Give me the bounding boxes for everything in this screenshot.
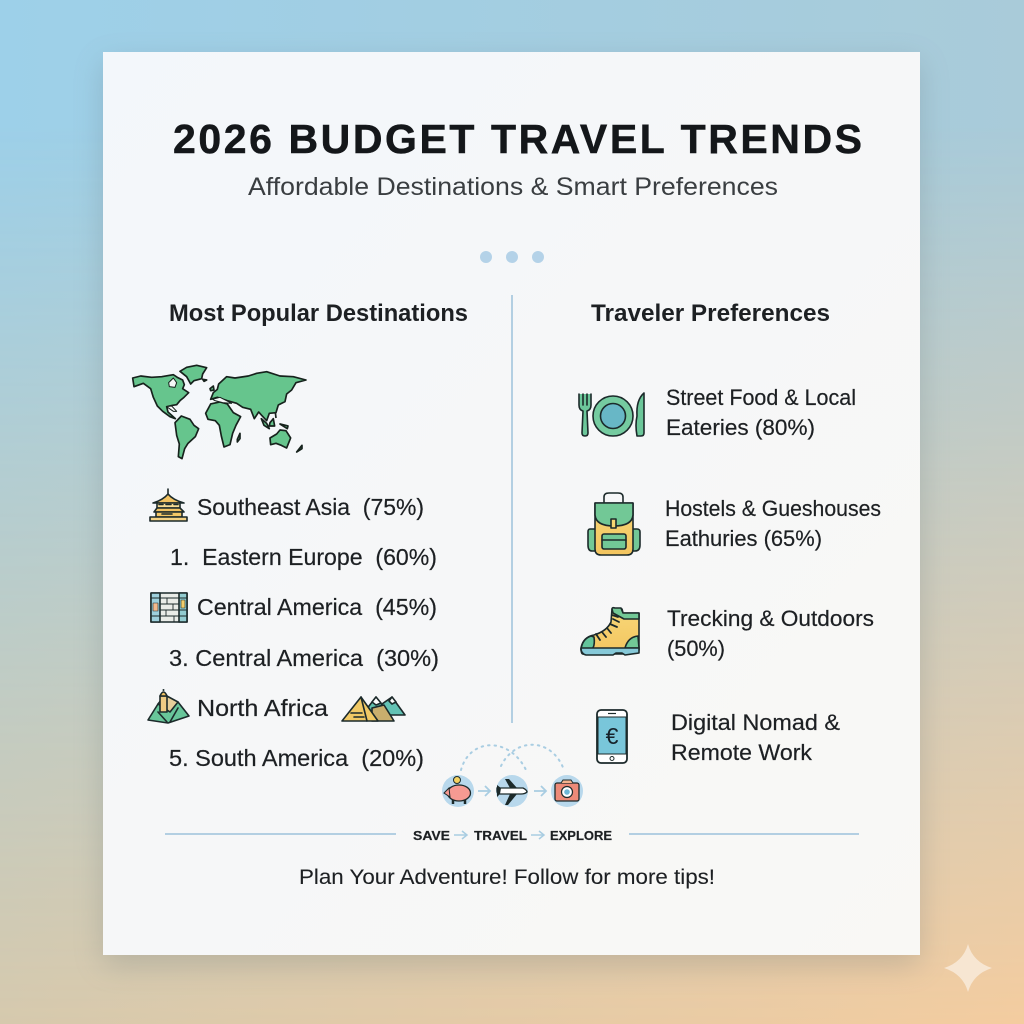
preference 2: [665, 496, 881, 551]
icon: sparkle: [944, 944, 992, 992]
flow caption: [413, 828, 612, 843]
panel: most popular destinations: [133, 300, 468, 771]
preference 4: Remote Work: [671, 740, 813, 765]
preference 1: Eateries (80%): [666, 415, 815, 440]
icon: plate and cutlery: [579, 393, 644, 436]
icon: phone with euro: €: [606, 723, 619, 749]
heading: preferences: Traveler Preferences: [591, 300, 830, 327]
preference 1: [666, 385, 856, 440]
flow caption: TRAVEL: [474, 828, 527, 843]
destination 1: Southeast Asia (75%): [197, 494, 424, 520]
icon: piggy bank: [442, 775, 474, 807]
destination 6: 5. South America (20%): [169, 745, 424, 771]
column divider: [511, 295, 513, 723]
footer rules: [165, 833, 859, 835]
heading: destinations: Most Popular Destinations: [169, 300, 468, 327]
flow caption: SAVE: [413, 828, 450, 843]
preference 3: (50%): [667, 636, 725, 661]
icon: hiking boot: [581, 608, 639, 655]
title: 2026 BUDGET TRAVEL TRENDS: [173, 116, 862, 162]
icon: brick wall: [151, 593, 187, 622]
preference 3: [667, 606, 874, 661]
dotted arcs: [461, 745, 564, 770]
destination 3: Central America (45%): [197, 594, 437, 620]
subtitle: Affordable Destinations & Smart Preferences: [248, 173, 778, 201]
flow arrow 2: [534, 786, 546, 796]
footer call to action: Plan Your Adventure! Follow for more tips!: [299, 866, 715, 889]
preference 4: Digital Nomad &: [671, 710, 840, 735]
flow arrow 1: [478, 786, 490, 796]
preference 3: Trecking & Outdoors: [667, 606, 874, 631]
preference 1: Street Food & Local: [666, 385, 856, 410]
destination 4: 3. Central America (30%): [169, 645, 439, 671]
panel: traveler preferences: [579, 300, 881, 765]
icon: phone with euro: [597, 710, 627, 763]
preference 4: [671, 710, 840, 765]
decorative dots: [480, 251, 544, 263]
card shadow: [103, 62, 920, 965]
destination 5: North Africa: [197, 695, 328, 721]
icon: world map: [133, 365, 306, 459]
main card panel: [103, 52, 920, 955]
destination 2: 1. Eastern Europe (60%): [170, 544, 437, 570]
flow caption: EXPLORE: [550, 828, 612, 843]
save travel explore flow: [413, 745, 612, 843]
icon: hill mosque: [148, 690, 189, 723]
icon: camera: [551, 775, 583, 807]
preference 2: Hostels & Gueshouses: [665, 496, 881, 521]
icon: pagoda temple: [150, 489, 187, 521]
preference 2: Eathuries (65%): [665, 526, 822, 551]
icon: airplane: [496, 775, 528, 807]
icon: backpack: [588, 493, 640, 555]
icon: pyramids: [342, 697, 405, 721]
